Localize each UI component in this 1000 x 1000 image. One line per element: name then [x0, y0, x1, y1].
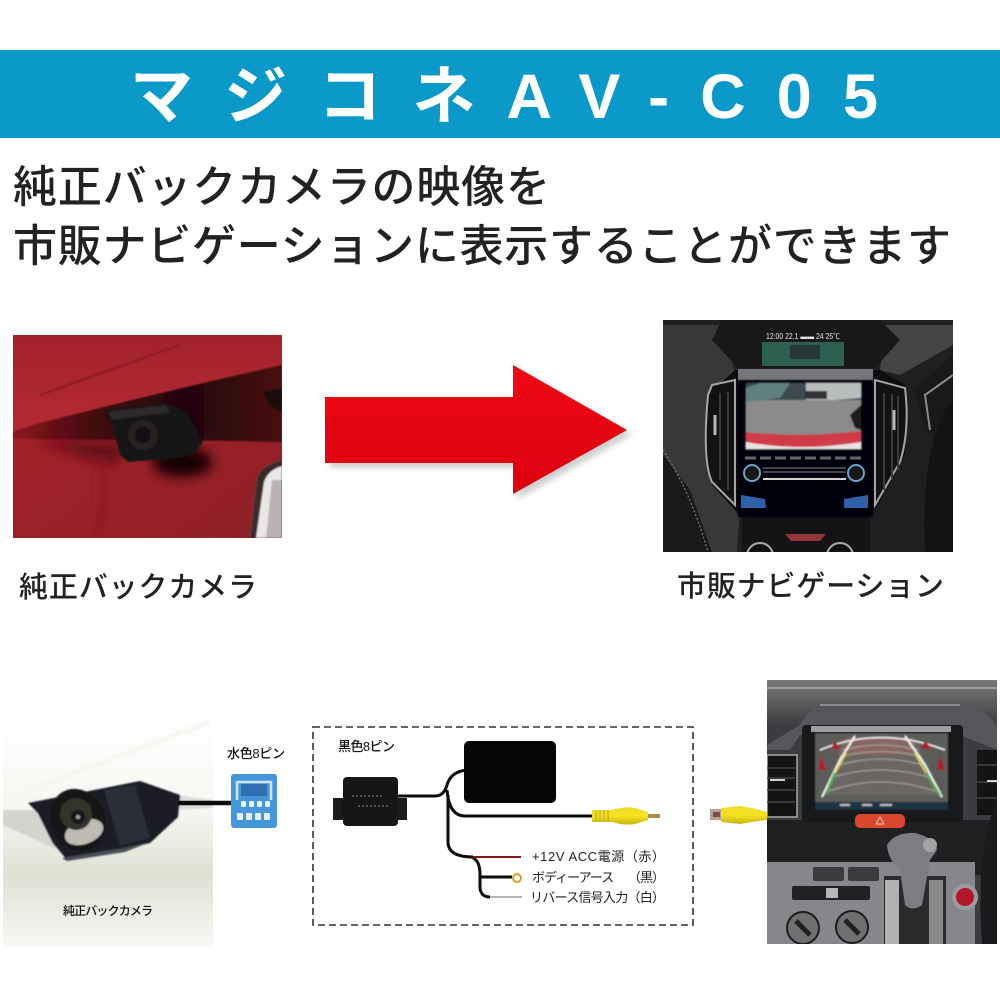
upper display: 12:00 22.1 ▬▬ 24 25℃	[766, 332, 840, 341]
steering wheel edge	[980, 800, 997, 944]
label: black 8 pin: 黒色8ピン	[338, 739, 395, 754]
ring terminal	[513, 874, 521, 882]
photo: aftermarket navigation dashboard	[663, 320, 953, 569]
headline text	[13, 163, 951, 271]
arrow	[325, 365, 632, 499]
headline text: 市販ナビゲーションに表示することができます	[13, 222, 951, 271]
female RCA plug	[710, 806, 767, 824]
connector: black 8 pin	[333, 777, 407, 826]
rear view screen with guide lines	[815, 733, 948, 810]
vents	[715, 392, 898, 490]
left and right air vents	[767, 750, 999, 817]
yellow RCA plug	[592, 807, 660, 825]
photo: factory rear camera on red car	[13, 335, 282, 538]
camera body	[28, 780, 180, 861]
lower control panel	[767, 862, 975, 944]
control module box	[464, 741, 556, 803]
wiring labels: リバース信号入力（白）	[530, 890, 665, 905]
center console bezel	[708, 370, 905, 518]
icon: blue 8 pin connector	[231, 774, 277, 828]
upper display	[712, 325, 900, 366]
hazard button	[855, 814, 905, 828]
hazard and lower knobs	[742, 518, 870, 552]
wiring labels: ボディーアース （黒）	[532, 870, 665, 885]
label: factory back camera: 純正バックカメラ	[19, 571, 257, 604]
shift lever	[884, 833, 946, 944]
monitor bezel	[802, 725, 963, 822]
wiring labels: +12V ACC電源（赤）	[532, 849, 665, 864]
label: aftermarket navigation: 市販ナビゲーション	[677, 570, 944, 603]
navigation screen with rear view	[738, 380, 873, 517]
label: light blue 8 pin: 水色8ピン	[227, 746, 285, 761]
console controls	[741, 458, 868, 508]
headline text: 純正バックカメラの映像を	[13, 163, 550, 212]
photo: navigation with guide lines	[767, 680, 999, 944]
wiring labels	[530, 849, 665, 905]
panel: harness product diagram	[313, 727, 693, 925]
photo caption: 純正バックカメラ	[63, 903, 153, 918]
title text: マジコネAV-C05	[130, 62, 878, 132]
chrome trim	[250, 388, 282, 538]
cable to blue connector	[178, 801, 232, 805]
camera body	[105, 403, 203, 462]
title banner	[0, 50, 1000, 138]
photo: back camera close-up	[3, 720, 213, 947]
start button	[952, 884, 978, 910]
wires	[398, 770, 594, 897]
